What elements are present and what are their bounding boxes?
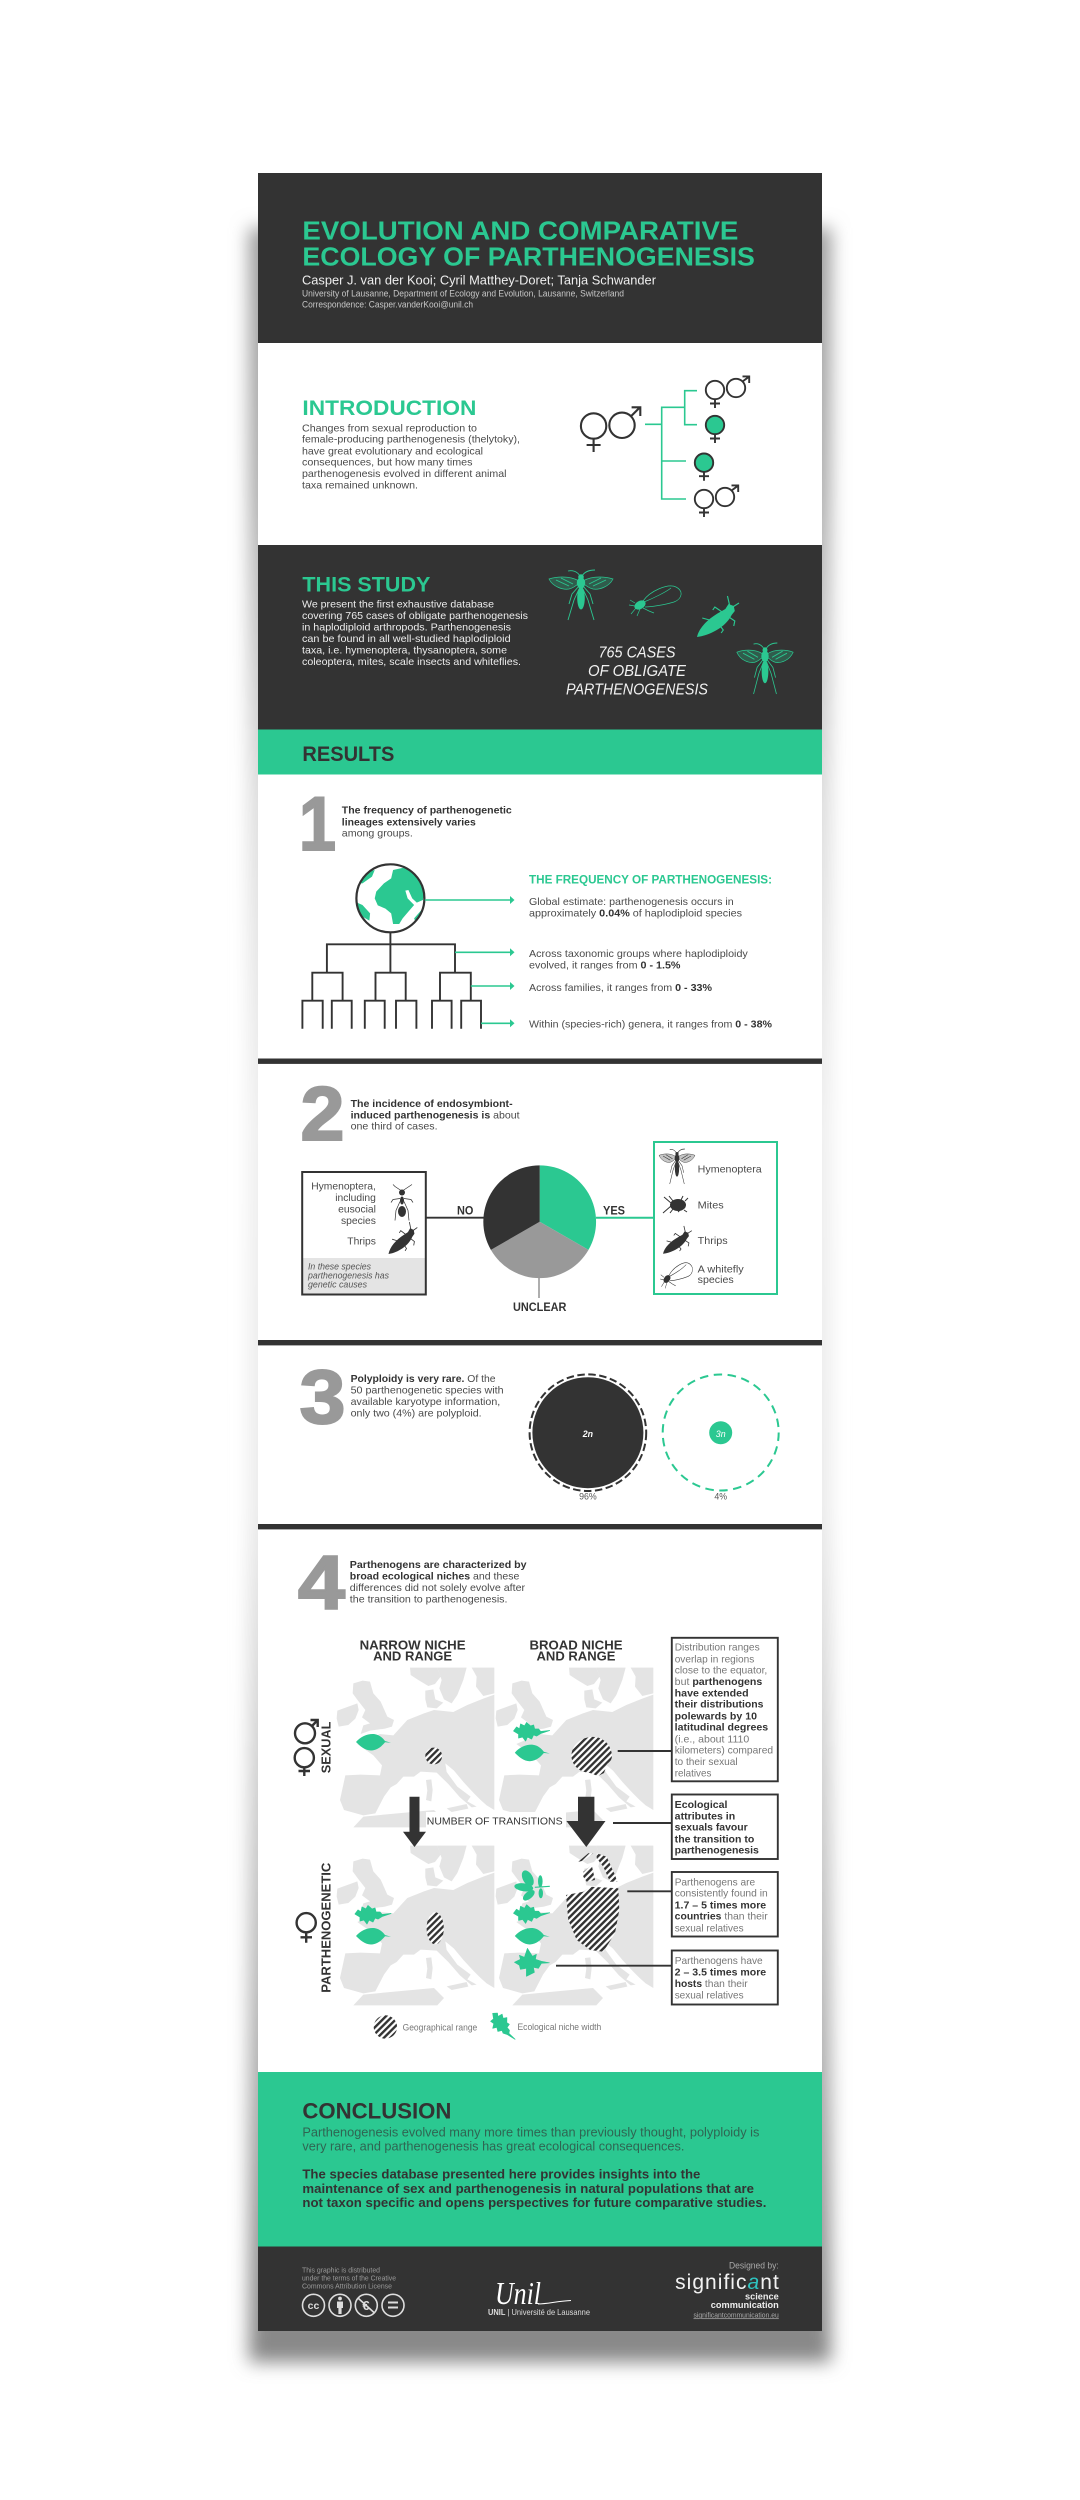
box: hosts: sexual relatives bbox=[675, 1991, 744, 2002]
conclusion bold text: not taxon specific and opens perspectives for future comparative studies. bbox=[302, 2195, 766, 2210]
sexual narrow: leaf and range bbox=[356, 1734, 442, 1764]
box: no endosymbiont: In these species bbox=[308, 1262, 372, 1272]
box: ecological attributes: the transition to bbox=[675, 1834, 754, 1845]
result 3 text: available karyotype information, bbox=[351, 1397, 500, 1408]
conclusion text: Parthenogenesis evolved many more times than previously thought, polyploidy is bbox=[302, 2124, 760, 2139]
frequency estimates text: Across taxonomic groups where haplodiploidy bbox=[529, 949, 749, 960]
column headings bbox=[360, 1638, 622, 1664]
icon: green insects bbox=[549, 570, 793, 694]
box: no endosymbiont: eusocial bbox=[338, 1205, 376, 1216]
box: ecological attributes: parthenogenesis bbox=[675, 1846, 759, 1857]
number 1: 1 bbox=[299, 782, 336, 867]
column headings: BROAD NICHE bbox=[530, 1638, 622, 1652]
box: distribution bbox=[672, 1638, 778, 1781]
icon: reproduction tree bbox=[581, 376, 749, 517]
box: yes endosymbiont: Mites bbox=[698, 1200, 724, 1211]
box: countries: sexual relatives bbox=[675, 1923, 744, 1934]
box: yes endosymbiont: Hymenoptera bbox=[698, 1165, 762, 1176]
panel: footer bbox=[258, 2246, 822, 2331]
conclusion text: very rare, and parthenogenesis has great ecological consequences. bbox=[302, 2139, 684, 2154]
parthenogenetic broad: leaves and range bbox=[514, 1853, 619, 1976]
icon: parthenogenetic bbox=[297, 1863, 334, 1993]
box: distribution: have extended bbox=[675, 1688, 749, 1699]
box: no endosymbiont: including bbox=[335, 1193, 376, 1204]
box: yes endosymbiont: A whitefly bbox=[698, 1264, 745, 1275]
callout: 765 cases: OF OBLIGATE bbox=[588, 663, 687, 680]
this study text: taxa, i.e. hymenoptera, thysanoptera, some bbox=[302, 645, 507, 656]
arrows: tree levels bbox=[425, 896, 514, 1027]
panel: header bbox=[258, 173, 822, 343]
panel: conclusion bbox=[258, 2072, 822, 2247]
result 2 text: induced parthenogenesis is about bbox=[351, 1110, 520, 1121]
arrow: narrow transitions bbox=[403, 1797, 426, 1847]
column headings: NARROW NICHE bbox=[360, 1638, 466, 1652]
box: distribution: to their sexual bbox=[675, 1757, 738, 1768]
frequency estimates text bbox=[529, 897, 772, 1031]
box: hosts: Parthenogens have bbox=[675, 1956, 763, 1967]
panel: this study bbox=[258, 545, 822, 730]
box: ecological attributes bbox=[672, 1794, 778, 1859]
heading: this study: THIS STUDY bbox=[302, 574, 430, 597]
icon: parthenogenetic: PARTHENOGENETIC bbox=[320, 1863, 334, 1993]
license text: This graphic is distributed bbox=[302, 2266, 380, 2275]
chart: diploid circle: 96% bbox=[579, 1492, 597, 1502]
logo: Unil bbox=[488, 2275, 590, 2317]
number 3: 3 bbox=[300, 1355, 346, 1440]
conclusion bold text: maintenance of sex and parthenogenesis in natural populations that are bbox=[302, 2181, 754, 2196]
logo: significant science communication: communication bbox=[711, 2300, 779, 2311]
pie chart bbox=[426, 1165, 653, 1314]
box: yes endosymbiont: Thrips bbox=[698, 1236, 728, 1247]
number 2: 2 bbox=[300, 1072, 344, 1157]
icon: sexual bbox=[295, 1720, 334, 1776]
box: hosts: hosts than their bbox=[675, 1979, 748, 1990]
connector lines bbox=[556, 1751, 671, 1966]
number 4: 4 bbox=[298, 1540, 345, 1626]
icon: creative commons: cc bbox=[308, 2300, 319, 2312]
introduction text: taxa remained unknown. bbox=[302, 480, 418, 491]
callout: 765 cases: 765 CASES bbox=[598, 644, 676, 661]
introduction text: Changes from sexual reproduction to bbox=[302, 423, 477, 434]
frequency estimates text: Within (species-rich) genera, it ranges from 0 - 38% bbox=[529, 1020, 772, 1031]
pie chart: UNCLEAR bbox=[513, 1302, 567, 1314]
affiliation bbox=[302, 289, 624, 310]
title: EVOLUTION AND COMPARATIVE bbox=[302, 215, 738, 245]
result 1 text bbox=[342, 806, 512, 840]
logo: Unil: Unil bbox=[495, 2275, 541, 2311]
box: yes endosymbiont: species bbox=[698, 1275, 734, 1286]
logo: significant science communication: significantcommunication.eu bbox=[694, 2310, 779, 2319]
column headings: AND RANGE bbox=[373, 1650, 452, 1664]
result 1 text: among groups. bbox=[342, 829, 413, 840]
box: no endosymbiont: Hymenoptera, bbox=[311, 1182, 376, 1193]
chart: polyploid circle bbox=[663, 1374, 779, 1502]
box: no endosymbiont: genetic causes bbox=[308, 1280, 368, 1290]
frequency estimates text: approximately 0.04% of haplodiploid species bbox=[529, 909, 742, 920]
box: distribution: overlap in regions bbox=[675, 1654, 754, 1665]
this study text: can be found in all well-studied haplodiploid bbox=[302, 634, 511, 645]
this study text bbox=[302, 599, 528, 668]
result 4 text bbox=[350, 1560, 527, 1605]
introduction text: parthenogenesis evolved in different animal bbox=[302, 469, 506, 480]
result 3 text: Polyploidy is very rare. Of the bbox=[351, 1374, 496, 1385]
chart: diploid circle bbox=[530, 1374, 646, 1502]
result 4 text: the transition to parthenogenesis. bbox=[350, 1594, 508, 1605]
box: countries: countries than their bbox=[675, 1912, 768, 1923]
icon: creative commons bbox=[302, 2294, 404, 2316]
box: ecological attributes: sexuals favour bbox=[675, 1823, 748, 1834]
result 4 text: Parthenogens are characterized by bbox=[350, 1560, 527, 1571]
box: no endosymbiont bbox=[302, 1172, 426, 1294]
logo: significant science communication bbox=[675, 2261, 779, 2319]
box: no endosymbiont: parthenogenesis has bbox=[307, 1271, 390, 1281]
box: hosts: 2 – 3.5 times more bbox=[675, 1967, 766, 1978]
affiliation: Correspondence: Casper.vanderKooi@unil.ch bbox=[302, 300, 473, 310]
pie chart: YES bbox=[603, 1205, 625, 1217]
logo: significant science communication: Designed by: bbox=[729, 2261, 779, 2272]
license text bbox=[302, 2266, 396, 2291]
logo: significant science communication: significant bbox=[675, 2271, 779, 2294]
result 2 text: The incidence of endosymbiont- bbox=[351, 1099, 513, 1110]
label: number of transitions: NUMBER OF TRANSITIONS bbox=[427, 1816, 563, 1828]
introduction text: consequences, but how many times bbox=[302, 458, 472, 469]
title: ECOLOGY OF PARTHENOGENESIS bbox=[302, 241, 755, 271]
box: countries bbox=[672, 1872, 778, 1936]
frequency estimates text: evolved, it ranges from 0 - 1.5% bbox=[529, 961, 680, 972]
box: yes endosymbiont bbox=[654, 1142, 777, 1294]
maps bbox=[337, 1668, 653, 2005]
result 4 text: differences did not solely evolve after bbox=[350, 1583, 526, 1594]
box: distribution: their distributions bbox=[675, 1700, 764, 1711]
panel: results heading: RESULTS bbox=[302, 743, 394, 766]
box: distribution: kilometers) compared bbox=[675, 1746, 773, 1757]
box: countries: consistently found in bbox=[675, 1889, 768, 1900]
pie chart: NO bbox=[457, 1205, 473, 1217]
box: hosts bbox=[672, 1950, 778, 2004]
poster panel bbox=[258, 173, 822, 2331]
chart: polyploid circle: 3n bbox=[716, 1429, 726, 1439]
panel: result 1 bbox=[299, 782, 772, 1031]
license text: Commons Attribution License bbox=[302, 2282, 392, 2291]
panel: result 2 bbox=[300, 1072, 777, 1314]
box: no endosymbiont: species bbox=[341, 1216, 376, 1227]
result 2 text: one third of cases. bbox=[351, 1122, 438, 1133]
this study text: coleoptera, mites, scale insects and whiteflies. bbox=[302, 657, 521, 668]
conclusion bold text: The species database presented here provides insights into the bbox=[302, 2167, 700, 2182]
heading: introduction: INTRODUCTION bbox=[302, 397, 476, 420]
legend: Ecological niche width bbox=[518, 2022, 601, 2032]
box: distribution: close to the equator, bbox=[675, 1666, 767, 1677]
license text: under the terms of the Creative bbox=[302, 2274, 396, 2283]
icon: globe bbox=[355, 864, 424, 932]
arrow: broad transitions bbox=[566, 1797, 606, 1847]
legend bbox=[374, 2008, 601, 2046]
icon: creative commons: € bbox=[362, 2298, 370, 2313]
box: distribution: latitudinal degrees bbox=[675, 1723, 768, 1734]
box: distribution: but parthenogens bbox=[675, 1677, 763, 1688]
panel: result 4 bbox=[295, 1540, 778, 2046]
authors: Casper J. van der Kooi; Cyril Matthey-Doret; Tanja Schwander bbox=[302, 273, 657, 288]
box: distribution: polewards by 10 bbox=[675, 1711, 757, 1722]
result 4 text: broad ecological niches and these bbox=[350, 1571, 520, 1582]
heading: frequency: THE FREQUENCY OF PARTHENOGENESIS: bbox=[529, 872, 772, 886]
box: distribution: (i.e., about 1110 bbox=[675, 1734, 750, 1745]
parthenogenetic narrow: leaves and range bbox=[355, 1906, 444, 1944]
affiliation: University of Lausanne, Department of Ecology and Evolution, Lausanne, Switzerland bbox=[302, 289, 624, 299]
introduction text: female-producing parthenogenesis (thelytoky), bbox=[302, 435, 520, 446]
conclusion text bbox=[302, 2124, 760, 2154]
introduction text: have great evolutionary and ecological bbox=[302, 446, 483, 457]
box: countries: 1.7 – 5 times more bbox=[675, 1900, 766, 1911]
box: no endosymbiont: Thrips bbox=[347, 1237, 376, 1248]
result 1 text: lineages extensively varies bbox=[342, 817, 476, 828]
panel: result 3 bbox=[300, 1355, 779, 1502]
icon: sexual: SEXUAL bbox=[320, 1721, 334, 1773]
callout: 765 cases bbox=[566, 644, 709, 698]
result 1 text: The frequency of parthenogenetic bbox=[342, 806, 512, 817]
frequency estimates text: Across families, it ranges from 0 - 33% bbox=[529, 983, 712, 994]
result 3 text: only two (4%) are polyploid. bbox=[351, 1408, 482, 1419]
introduction text bbox=[302, 423, 520, 491]
logo: Unil: UNIL | Université de Lausanne bbox=[488, 2308, 590, 2317]
title bbox=[302, 215, 755, 271]
conclusion bold text bbox=[302, 2167, 766, 2210]
this study text: We present the first exhaustive database bbox=[302, 599, 494, 610]
legend: Geographical range bbox=[403, 2022, 477, 2032]
this study text: in haplodiploid arthropods. Parthenogenesis bbox=[302, 622, 511, 633]
logo: significant science communication: science bbox=[745, 2291, 779, 2302]
heading: conclusion: CONCLUSION bbox=[302, 2098, 451, 2123]
sexual broad: leaves and range bbox=[514, 1722, 612, 1776]
result 3 text bbox=[351, 1374, 504, 1419]
chart: diploid circle: 2n bbox=[582, 1429, 593, 1439]
frequency estimates text: Global estimate: parthenogenesis occurs in bbox=[529, 897, 734, 908]
panel: introduction bbox=[302, 376, 749, 517]
box: ecological attributes: Ecological bbox=[675, 1800, 728, 1811]
box: ecological attributes: attributes in bbox=[675, 1811, 735, 1822]
box: countries: Parthenogens are bbox=[675, 1877, 755, 1888]
box: distribution: relatives bbox=[675, 1769, 711, 1780]
box: distribution: Distribution ranges bbox=[675, 1643, 760, 1654]
callout: 765 cases: PARTHENOGENESIS bbox=[566, 681, 709, 698]
result 2 text bbox=[351, 1099, 520, 1133]
phylogenetic tree bbox=[302, 933, 481, 1029]
result 3 text: 50 parthenogenetic species with bbox=[351, 1385, 504, 1396]
column headings: AND RANGE bbox=[536, 1650, 616, 1664]
this study text: covering 765 cases of obligate parthenogenesis bbox=[302, 611, 528, 622]
chart: polyploid circle: 4% bbox=[714, 1492, 727, 1502]
panel: results heading bbox=[258, 730, 822, 774]
